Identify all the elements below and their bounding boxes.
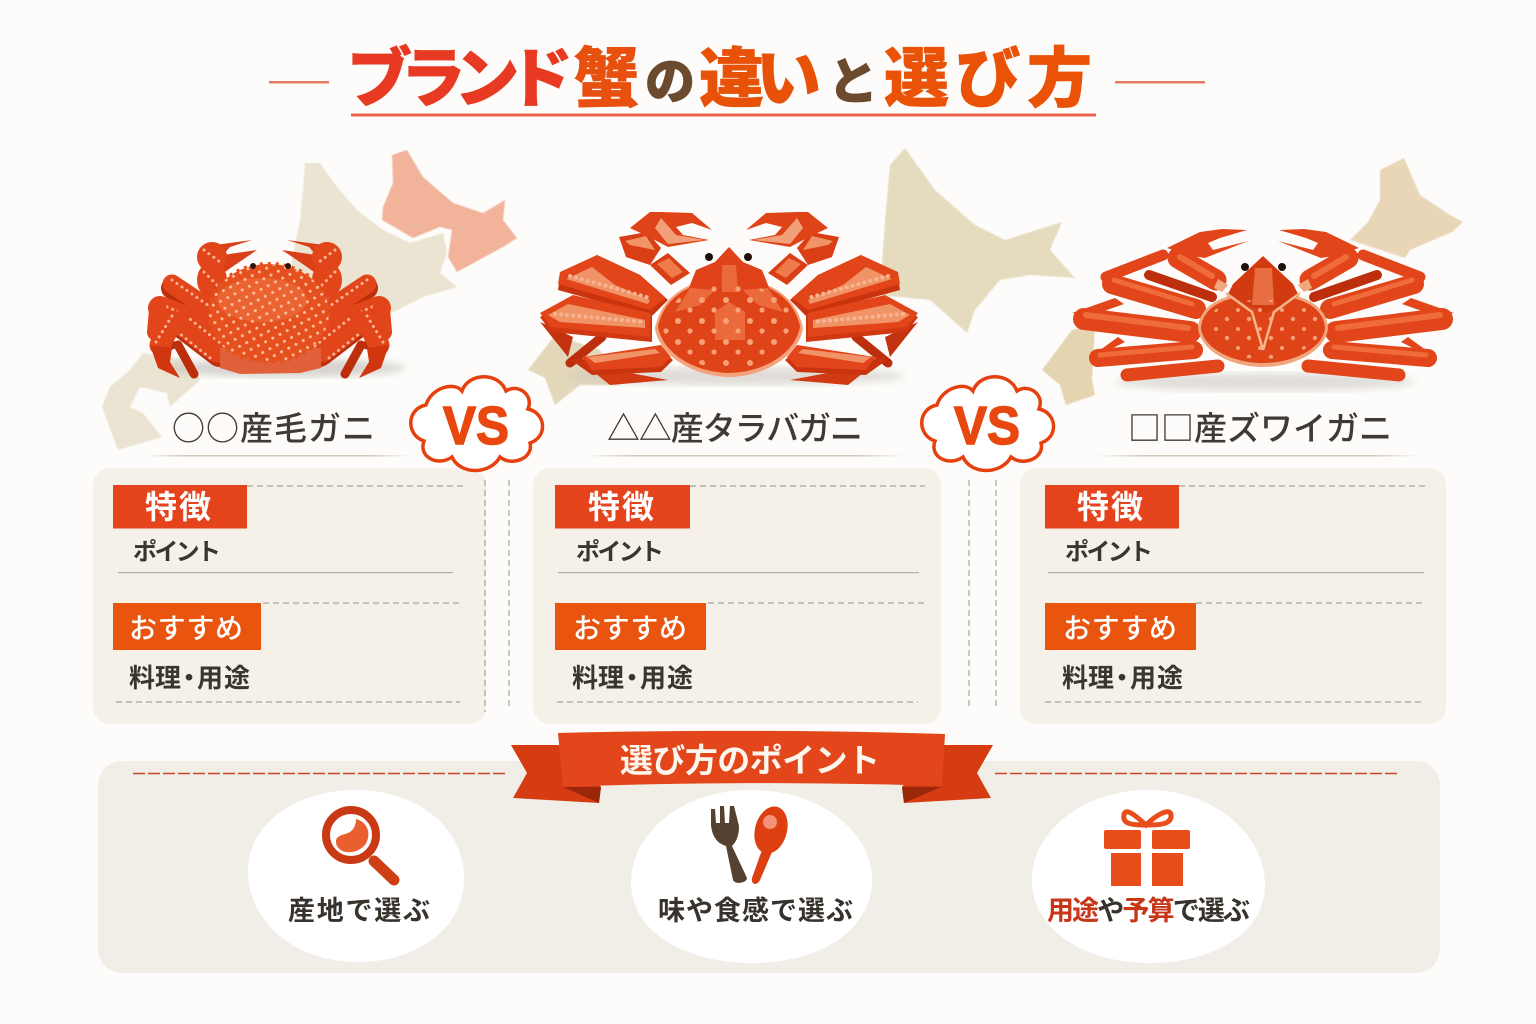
title left rule bbox=[269, 81, 329, 84]
panel: snow crab bbox=[1020, 468, 1446, 724]
map: Hokkaido and Honshu, crab 1 bbox=[102, 150, 517, 450]
VS badge 2: VS bbox=[954, 396, 1020, 456]
ribbon tails bbox=[511, 745, 601, 803]
name: king crab: △△産タラバガニ bbox=[607, 402, 863, 450]
panel 1 feature tag bbox=[113, 482, 247, 528]
panel 2 recommend tag: おすすめ bbox=[573, 613, 687, 644]
crab 3 left limbs bbox=[1072, 229, 1248, 375]
crab 2 head bbox=[688, 247, 770, 290]
title main text: 蟹 bbox=[574, 42, 639, 115]
crab 1 eyes bbox=[250, 263, 291, 269]
panel 2 feature tag bbox=[555, 482, 690, 528]
point: by taste bbox=[631, 790, 872, 963]
title bbox=[269, 42, 1205, 116]
ribbon band bbox=[558, 731, 945, 787]
panel 3 recommend tag bbox=[1045, 603, 1196, 650]
crab 2 shadow bbox=[565, 367, 905, 385]
panel 1 recommend tag: おすすめ bbox=[129, 613, 243, 644]
panel 3 feature tag bbox=[1045, 482, 1179, 528]
VS badge 2 bbox=[922, 377, 1054, 470]
blob bbox=[1032, 790, 1265, 963]
name: hairy crab: ○○産毛ガニ bbox=[172, 402, 375, 450]
panel 1 dashed rules bbox=[116, 486, 465, 702]
ribbon heading bbox=[511, 731, 993, 803]
panel 3 feature label: ポイント bbox=[1065, 539, 1153, 566]
crab 3 shadow bbox=[1115, 373, 1415, 391]
bottom panel red dashed rules bbox=[133, 772, 1400, 774]
title main text: 違い bbox=[699, 42, 821, 115]
blob bbox=[248, 790, 464, 962]
panel 2 feature tag: 特徴 bbox=[588, 482, 654, 528]
title main text: ブランド bbox=[347, 42, 573, 115]
name: snow crab: □□産ズワイガニ bbox=[1128, 402, 1392, 450]
crab 3 head bbox=[1227, 256, 1299, 313]
VS badge 1 bbox=[411, 377, 543, 470]
map: Hokkaido and Honshu, crab 2 bbox=[528, 148, 1075, 405]
crab 2 right limbs bbox=[746, 212, 918, 385]
crab 1: hairy crab bbox=[150, 240, 405, 378]
crab 2 left limbs bbox=[540, 212, 712, 385]
VS badge 1: VS bbox=[443, 396, 509, 456]
label: 用途や予算で選ぶ bbox=[1047, 896, 1250, 926]
point: by use and budget bbox=[1032, 790, 1265, 963]
panel 2 recommend label: 料理・用途 bbox=[572, 658, 693, 695]
panel 3 recommend tag: おすすめ bbox=[1063, 613, 1177, 644]
blob bbox=[631, 790, 872, 963]
crab 3 eyes bbox=[1241, 263, 1286, 271]
title main text: の bbox=[645, 54, 695, 110]
crab 3 shell bbox=[1198, 292, 1328, 367]
crab 2 shell dots bbox=[662, 284, 796, 369]
crab 1 shadow bbox=[165, 359, 405, 377]
panel 1 background bbox=[93, 468, 486, 724]
crab 2 eyes bbox=[705, 253, 752, 261]
panel 1 recommend label: 料理・用途 bbox=[129, 658, 250, 695]
panel 2 background bbox=[533, 468, 941, 724]
panel 3 recommend label: 料理・用途 bbox=[1062, 658, 1183, 695]
panel 3 dashed rules bbox=[1045, 486, 1425, 702]
icon: gift box bbox=[1104, 812, 1190, 886]
ribbon text: 選び方のポイント bbox=[620, 742, 880, 779]
column dividers bbox=[485, 480, 996, 712]
crab 1 left limbs bbox=[150, 240, 257, 378]
crab 2 shell bbox=[655, 278, 803, 377]
crab 3 right limbs bbox=[1278, 229, 1454, 375]
ribbon folds bbox=[563, 787, 601, 803]
panel 3 background bbox=[1020, 468, 1446, 724]
icon: magnifying glass bbox=[326, 810, 394, 880]
panel 1 feature label: ポイント bbox=[133, 539, 221, 566]
panel 2 recommend tag bbox=[555, 603, 706, 650]
crab 2 shell highlights bbox=[675, 265, 783, 340]
title main text: と bbox=[828, 54, 878, 110]
map: Hokkaido and Honshu, crab 3 bbox=[1042, 158, 1463, 405]
title main text: 選び方 bbox=[884, 42, 1092, 115]
crab 1 shell bbox=[209, 264, 329, 362]
crab 3: snow crab bbox=[1072, 229, 1454, 391]
label: 産地で選ぶ bbox=[288, 896, 430, 926]
crab 2: king crab bbox=[540, 212, 918, 385]
name underlines bbox=[145, 455, 1420, 456]
panel: selection points bbox=[98, 731, 1440, 973]
panel: king crab bbox=[533, 468, 941, 724]
crab 1 abdomen plate bbox=[220, 348, 321, 374]
crab 1 right limbs bbox=[282, 240, 389, 378]
panel 1 recommend tag bbox=[113, 603, 261, 650]
crab names bbox=[145, 402, 1420, 456]
panel 3 feature tag: 特徴 bbox=[1077, 482, 1143, 528]
map highlight region bbox=[382, 150, 517, 272]
label: 味や食感で選ぶ bbox=[658, 896, 853, 926]
panel 1 feature tag: 特徴 bbox=[145, 482, 211, 528]
panel 2 dashed rules bbox=[557, 486, 925, 702]
point: by origin bbox=[248, 790, 464, 962]
icon: spoon bbox=[749, 803, 793, 884]
panel: hairy crab bbox=[93, 468, 486, 724]
icon: fork bbox=[711, 806, 747, 883]
title right rule bbox=[1115, 81, 1205, 84]
title underline bbox=[351, 114, 1096, 116]
panel 2 feature label: ポイント bbox=[576, 539, 664, 566]
bottom panel background bbox=[98, 761, 1440, 973]
